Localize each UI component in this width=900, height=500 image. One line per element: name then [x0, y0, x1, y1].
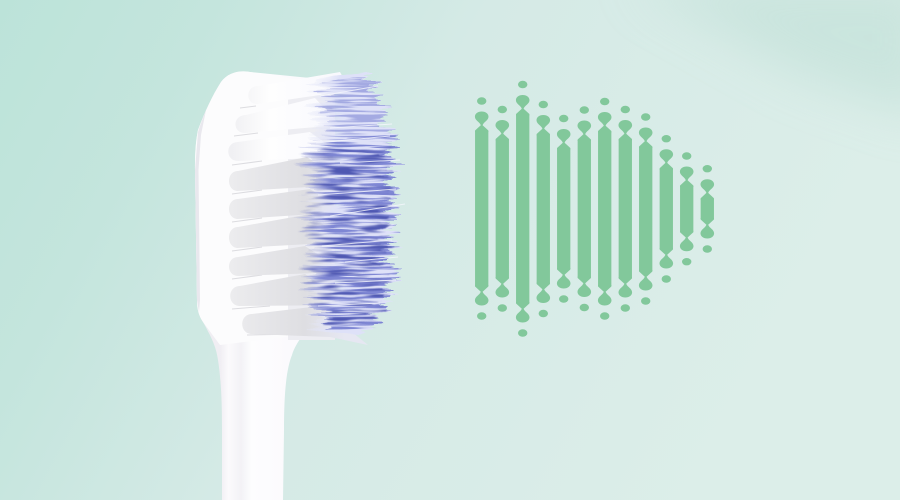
- toothbrush: [195, 71, 405, 500]
- sound wave bar 5: [557, 115, 570, 303]
- sound wave bar 10: [660, 135, 673, 283]
- small shadow notches between tufts: [232, 106, 300, 335]
- bristle tufts white bases: [228, 72, 368, 345]
- bristle tips dark blue streaks: [306, 145, 385, 325]
- sound wave bar 6: [578, 106, 591, 311]
- sound wave graphic: [475, 81, 714, 337]
- sound wave bar 8: [618, 106, 632, 312]
- white highlight bristle strands: [316, 86, 405, 306]
- bristle tips mid blue streaks: [308, 135, 392, 330]
- sound wave bar 1: [475, 97, 489, 320]
- bristle tips light blue: [315, 72, 392, 335]
- sound wave bar 2: [496, 106, 509, 312]
- sound wave bar 7: [598, 98, 612, 320]
- sound wave bar 4: [536, 101, 550, 317]
- sound wave bar 11: [680, 152, 694, 265]
- sound wave bar 12: [700, 165, 714, 253]
- sound wave bar 3: [516, 81, 530, 337]
- sound wave bar 9: [639, 113, 652, 305]
- bristle tips upper pale blue streaks: [322, 76, 392, 140]
- brush head and handle: [195, 71, 330, 500]
